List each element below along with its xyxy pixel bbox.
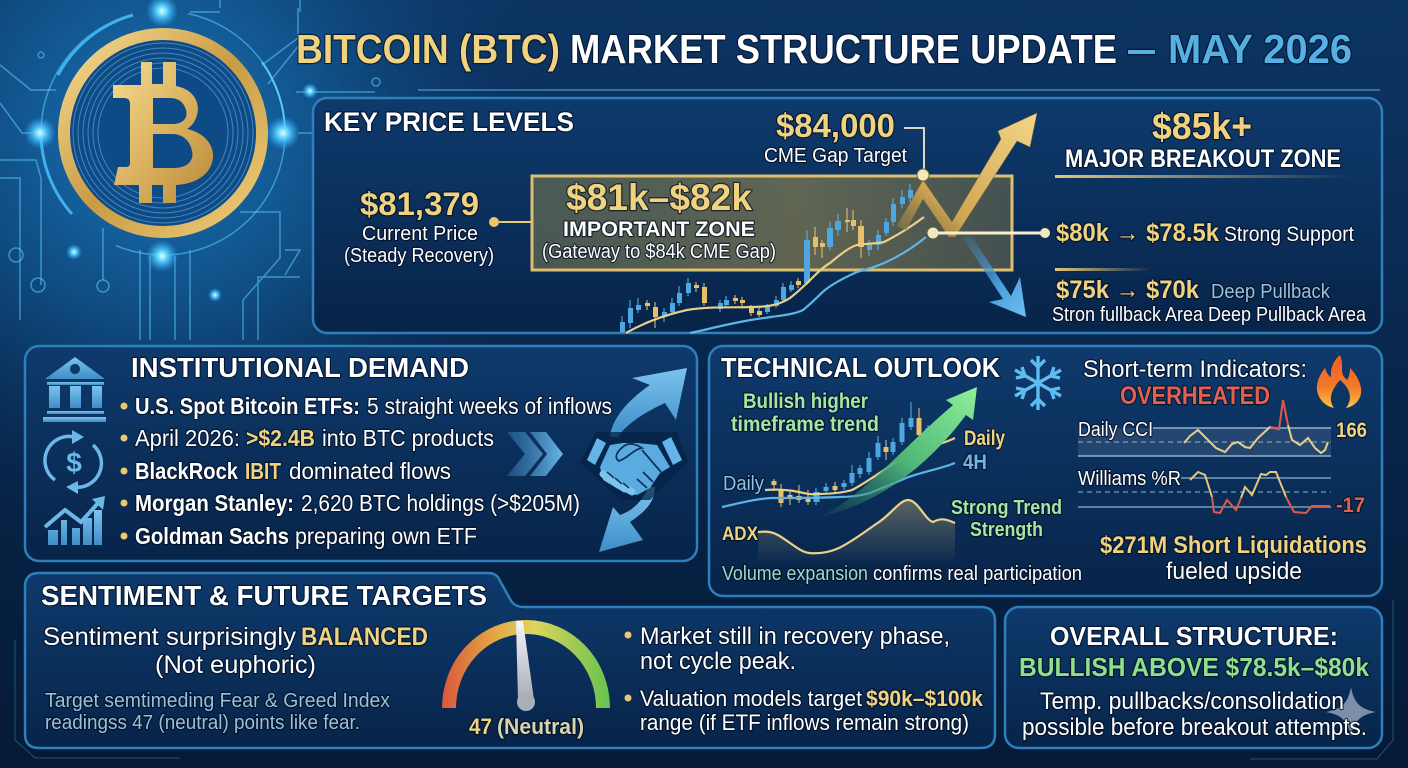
chart: daily cci: 166 [1336,419,1367,442]
panel: key price levels [313,98,1382,333]
list: institutional bullets: 2,620 BTC holdings (>$205M) [301,490,580,516]
text: short liquidations: fueled upside [1166,558,1302,585]
labels: moving averages [723,427,1005,495]
list: institutional bullets: Morgan Stanley: [135,490,294,516]
list: future targets: not cycle peak. [640,648,796,675]
heading: technical outlook: TECHNICAL OUTLOOK [721,352,1000,383]
label: bullish trend [731,390,879,436]
callout: important zone [542,177,776,263]
list: institutional bullets: preparing own ETF [295,523,477,549]
labels: moving averages: 4H [963,451,987,474]
text: volume note [722,563,1082,585]
text: fear and greed note [45,690,390,734]
chart: fear and greed gauge [449,621,603,739]
callout: deep pullback [1052,276,1367,326]
panel: overall structure [1005,607,1382,748]
heading: short-term indicators [1083,356,1307,410]
title: MARKET STRUCTURE UPDATE [570,26,1117,72]
text: short liquidations [1100,532,1367,585]
list: institutional bullets: >$2.4B [246,425,315,451]
chart: adx: Strength [970,519,1043,541]
list: institutional bullets: into BTC products [322,425,494,451]
text: structure note: Temp. pullbacks/consolidation [1040,688,1344,715]
list: institutional bullets: Goldman Sachs [135,523,289,549]
chart: daily candles with moving averages [722,402,955,507]
chart: fear and greed gauge: 47 [469,714,492,739]
icon: handshake [580,432,688,500]
title: — [1128,26,1155,72]
chart: williams %r [1078,468,1365,517]
list: institutional bullets: U.S. Spot Bitcoin ETFs: [135,393,360,419]
list: institutional bullets: April 2026: [135,425,240,451]
heading: institutional demand: INSTITUTIONAL DEMAND [131,352,469,383]
callout: deep pullback: Stron fullback Area Deep Pullback Area [1052,304,1367,326]
heading: short-term indicators: OVERHEATED [1120,382,1270,410]
arrow: flow chevrons [507,432,563,476]
heading: key price levels: KEY PRICE LEVELS [324,107,574,137]
list: future targets: Valuation models target [640,686,862,711]
icon: dollar cycle: $ [66,447,82,478]
callout: current price: $81,379 [360,186,479,222]
callout: cme gap target [764,107,929,181]
callout: important zone: (Gateway to $84k CME Gap) [542,241,776,263]
callout: current price: (Steady Recovery) [344,245,494,267]
callout: major breakout zone [1055,106,1353,178]
callout: important zone: $81k–$82k [566,177,752,218]
panel: sentiment and future targets [25,573,995,748]
candlestick chart [620,184,926,333]
callout: cme gap target: CME Gap Target [764,145,907,167]
labels: moving averages: Daily [964,427,1005,450]
list: future targets: $90k–$100k [866,686,984,711]
chart: fear and greed gauge: (Neutral) [497,714,584,739]
arrow: gold breakout arrow [897,113,1037,237]
callout: important zone: IMPORTANT ZONE [563,218,755,241]
callout: deep pullback: Deep Pullback [1211,281,1331,303]
text: sentiment balanced: (Not euphoric) [155,651,316,679]
heading: short-term indicators: Short-term Indicators: [1083,356,1307,383]
icon: flame [1317,355,1361,408]
text: bullish above: BULLISH ABOVE $78.5k–$80k [1019,652,1369,682]
text: sentiment balanced: BALANCED [301,623,428,651]
panel: institutional demand [25,346,697,561]
label: bullish trend: timeframe trend [731,413,879,436]
callout: current price [344,186,532,267]
list: institutional bullets [120,393,612,549]
text: volume note: confirms real participation [873,563,1082,585]
list: future targets: Market still in recovery phase, [640,623,950,650]
chart: adx: ADX [722,524,758,545]
heading: overall structure: OVERALL STRUCTURE: [1050,621,1338,651]
callout: deep pullback: $75k → $70k [1056,276,1199,304]
callout: strong support: Strong Support [1224,223,1354,246]
chart: adx: Strong Trend [951,497,1062,519]
text: structure note: possible before breakout attempts. [1022,714,1367,741]
text: short liquidations: $271M Short Liquidations [1100,532,1367,559]
title: BITCOIN (BTC) [296,26,560,72]
text: fear and greed note: readingss 47 (neutral) points like fear. [45,712,360,734]
icon: bank [43,357,106,422]
text: volume note: Volume expansion [722,563,868,585]
heading: sentiment and future targets: SENTIMENT & FUTURE TARGETS [41,580,487,611]
arrow: blue pullback arrow [962,237,1026,317]
arrow: curved up [610,368,687,437]
callout: strong support [928,219,1354,271]
icon: growth chart [45,496,105,545]
text: sentiment balanced: Sentiment surprisingly [43,623,297,651]
chart: daily cci: Daily CCI [1078,419,1153,441]
list: institutional bullets: IBIT [245,458,281,484]
chart: daily cci [1078,400,1367,456]
callout: current price: Current Price [362,223,478,245]
list: institutional bullets: BlackRock [135,458,238,484]
labels: moving averages: Daily [723,473,764,495]
icon: snowflake [1015,356,1061,410]
icon: bitcoin coin [63,33,263,233]
text: sentiment balanced [43,623,428,679]
panel: technical outlook [709,346,1382,596]
arrow: green trend arrow [816,387,977,518]
callout: major breakout zone: $85k+ [1152,106,1252,147]
text: fear and greed note: Target semtimeding Fear & Greed Index [45,690,390,712]
arrow: curved down [599,487,655,552]
important zone box [532,176,1012,270]
chart: williams %r: Williams %R [1078,468,1181,490]
chart: adx [722,497,1062,565]
list: institutional bullets: dominated flows [289,458,451,484]
callout: strong support: $80k → $78.5k [1056,219,1219,247]
callout: major breakout zone: MAJOR BREAKOUT ZONE [1065,145,1341,173]
label: bullish trend: Bullish higher [743,390,868,413]
text: structure note [1022,688,1367,741]
icon: sparkle [1326,687,1376,737]
title: MAY 2026 [1168,26,1352,72]
list: institutional bullets: 5 straight weeks of inflows [367,393,612,419]
title [296,26,1352,72]
chart: williams %r: -17 [1336,494,1365,517]
callout: cme gap target: $84,000 [776,107,895,144]
list: future targets [624,623,984,735]
icon: dollar cycle [45,430,101,494]
list: future targets: range (if ETF inflows remain strong) [640,710,969,735]
